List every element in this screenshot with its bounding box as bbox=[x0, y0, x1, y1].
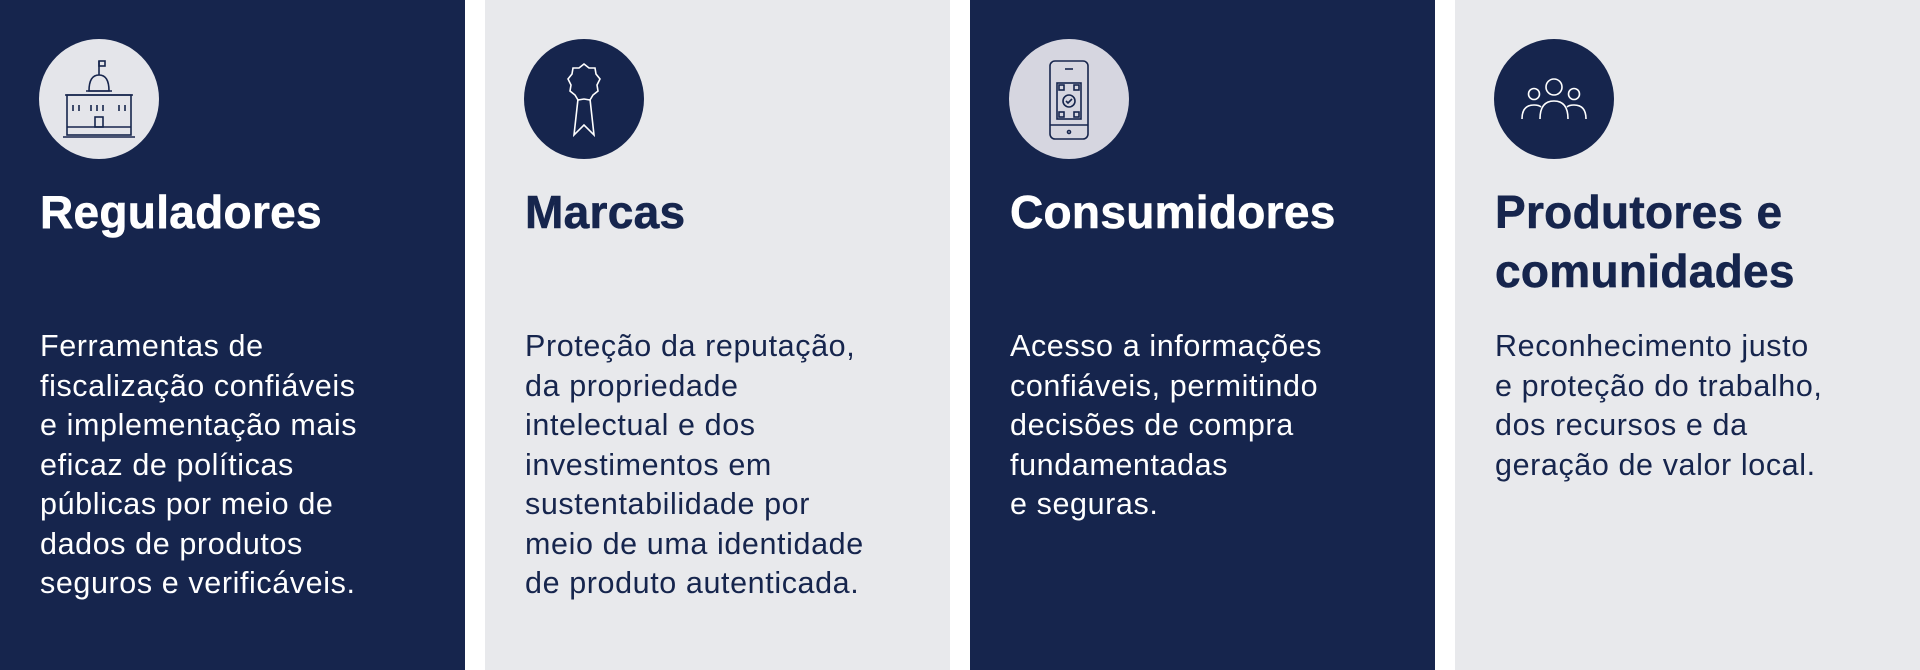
text block bbox=[40, 329, 357, 600]
heading bbox=[1495, 186, 1795, 297]
text block bbox=[1010, 329, 1322, 521]
text block: intelectual e dos bbox=[525, 408, 756, 442]
heading: comunidades bbox=[1495, 245, 1795, 297]
text block: eficaz de políticas bbox=[40, 448, 294, 482]
icon: phone with QR bbox=[1009, 39, 1129, 159]
text block: Reconhecimento justo bbox=[1495, 329, 1809, 363]
text block: seguros e verificáveis. bbox=[40, 566, 356, 600]
text block: Acesso a informações bbox=[1010, 329, 1322, 363]
text block: de produto autenticada. bbox=[525, 566, 859, 600]
text block: geração de valor local. bbox=[1495, 448, 1816, 482]
heading: Marcas bbox=[525, 186, 685, 238]
icon: award ribbon bbox=[524, 39, 644, 159]
text block: Proteção da reputação, bbox=[525, 329, 855, 363]
text block: da propriedade bbox=[525, 368, 739, 402]
heading: Produtores e bbox=[1495, 186, 1782, 238]
text block: meio de uma identidade bbox=[525, 526, 864, 560]
panel: Consumidores bbox=[970, 0, 1435, 670]
text block: e implementação mais bbox=[40, 408, 357, 442]
heading: Consumidores bbox=[1010, 186, 1336, 238]
text block: públicas por meio de bbox=[40, 487, 333, 521]
panel: Marcas bbox=[485, 0, 950, 670]
text block: e proteção do trabalho, bbox=[1495, 368, 1822, 402]
text block: fundamentadas bbox=[1010, 448, 1228, 482]
text block: Ferramentas de bbox=[40, 329, 264, 363]
text block: investimentos em bbox=[525, 448, 772, 482]
text block: e seguras. bbox=[1010, 487, 1158, 521]
text block: decisões de compra bbox=[1010, 408, 1294, 442]
heading: Reguladores bbox=[40, 186, 322, 238]
text block: sustentabilidade por bbox=[525, 487, 810, 521]
text block: dos recursos e da bbox=[1495, 408, 1748, 442]
text block: dados de produtos bbox=[40, 526, 303, 560]
icon: people group bbox=[1494, 39, 1614, 159]
icon: government building bbox=[39, 39, 159, 159]
panel: Reguladores bbox=[0, 0, 465, 670]
panel: Produtores e comunidades bbox=[1455, 0, 1920, 670]
text block: confiáveis, permitindo bbox=[1010, 368, 1318, 402]
text block bbox=[525, 329, 864, 600]
text block bbox=[1495, 329, 1822, 482]
text block: fiscalização confiáveis bbox=[40, 368, 356, 402]
